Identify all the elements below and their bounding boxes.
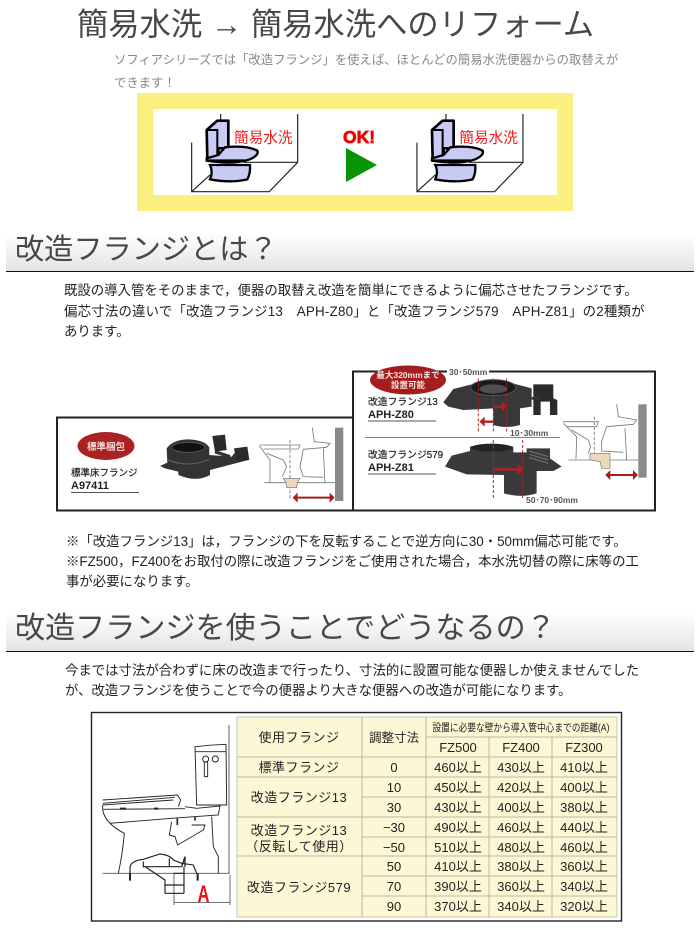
icon: standard toilet section [259,428,343,503]
table adjustment values: 90 [387,899,401,914]
table distance values: 360以上 [560,859,608,874]
table distance values: 380以上 [560,800,608,815]
heading bar: what is the flange [6,233,694,272]
label: A: A [198,881,210,908]
table flange names: 改造フランジ579 [247,880,351,895]
dimension: 10-30mm: 10･30mm [510,428,549,438]
panel: reform diagram [137,93,573,211]
table distance values: 430以上 [497,760,545,775]
table distance values: 490以上 [434,820,482,835]
label: standard floor flange: 標準床フランジ [71,467,138,479]
text: OK: OK! [343,127,375,147]
table: flange dimensions [237,717,617,917]
icon: toilet before [192,114,298,192]
table distance values: 430以上 [434,800,482,815]
intro text [114,53,618,90]
table distance values [434,760,608,914]
table distance values: 510以上 [434,840,482,855]
icon: toilet after: 簡易水洗 [459,128,518,146]
table distance values: 410以上 [434,859,482,874]
table distance values: 420以上 [497,780,545,795]
dimension: 30-50mm: 30･50mm [449,367,488,377]
table flange names [245,760,353,895]
table flange names: （反転して使用） [245,839,353,854]
table distance values: 460以上 [560,840,608,855]
table adjustment values: 50 [387,859,401,874]
table header: FZ300 [565,740,603,755]
table flange names: 標準フランジ [258,760,340,775]
table distance values: 480以上 [497,840,545,855]
notes text: ※「改造フランジ13」は，フランジの下を反転することで逆方向に30・50mm偏芯可能です。 [66,534,627,549]
label: standard floor flange: A97411 [71,480,109,492]
table distance values: 380以上 [497,859,545,874]
notes text: ※FZ500，FZ400をお取付の際に改造フランジをご使用された場合，本水洗切替の際に床等の工 [66,554,639,569]
table header: 使用フランジ [258,730,340,745]
label: flange 579 [368,448,443,474]
label: flange 13: APH-Z80 [368,409,414,421]
body text: what changes: 今までは寸法が合わずに床の改造まで行ったり、寸法的に設置可能な便器しか使えませんでした [65,663,639,678]
intro text: ソフィアシリーズでは「改造フランジ」を使えば、ほとんどの簡易水洗便器からの取替えが [114,53,618,67]
heading: what is the flange: 改造フランジとは？ [15,234,278,266]
label: flange 13: 改造フランジ13 [368,395,438,408]
table distance values: 360以上 [497,879,545,894]
table flange names: 改造フランジ13 [251,790,347,805]
table header: FZ500 [439,740,477,755]
table adjustment values: 0 [390,760,398,775]
table flange names: 改造フランジ13 [251,823,347,838]
icon: flange 13 [443,378,557,432]
label: max 320mm [370,366,446,394]
table header: 設置に必要な壁から導入管中心までの距離(A) [432,721,610,734]
table distance values: 450以上 [434,780,482,795]
table distance values: 370以上 [434,899,482,914]
arrow: green triangle [346,148,377,182]
heading bar: what changes [6,613,694,652]
body text: flange description: 既設の導入管をそのままで，便器の取替え改造を簡単にできるように偏芯させたフランジです。 [64,283,638,298]
icon: toilet after [417,114,523,192]
table header [258,721,610,755]
table adjustment values: −30 [383,820,405,835]
notes text: 事が必要になります。 [66,574,199,589]
table distance values: 340以上 [560,879,608,894]
heading: what changes: 改造フランジを使うことでどうなるの？ [15,612,556,645]
table header: 調整寸法 [369,731,419,745]
label: max 320mm: 最大320mmまで [376,370,440,380]
icon: modified toilet section [563,404,647,480]
table distance values: 410以上 [560,760,608,775]
notes text [66,534,639,589]
body text: what changes [65,663,639,698]
panel: modified flanges [352,366,656,512]
body text: flange description: あります。 [64,324,130,339]
intro text: できます！ [114,76,176,90]
label: flange 579: APH-Z81 [368,462,414,474]
table distance values: 340以上 [497,899,545,914]
table adjustment values: −50 [383,840,405,855]
icon: standard flange [160,435,249,479]
table adjustment values: 70 [387,879,401,894]
table adjustment values: 30 [387,800,401,815]
dimension: 50-70-90mm: 50･70･90mm [526,495,578,505]
table distance values: 320以上 [560,899,608,914]
table distance values: 460以上 [497,820,545,835]
table distance values: 400以上 [497,800,545,815]
table distance values: 460以上 [434,760,482,775]
table adjustment values: 10 [387,780,401,795]
label: standard package: 標準梱包 [87,441,125,453]
table header: FZ400 [502,740,540,755]
title: 簡易水洗 → 簡易水洗へのリフォーム [77,7,594,42]
icon: flange 579 [445,440,562,500]
table distance values: 400以上 [560,780,608,795]
icon: toilet cross-section [103,725,230,905]
table distance values: 440以上 [560,820,608,835]
label: standard package [78,432,134,460]
panel: standard flange [56,416,352,512]
label: flange 579: 改造フランジ579 [368,448,443,461]
label: standard floor flange [71,467,139,492]
body text: flange description [64,283,645,339]
body text: flange description: 偏芯寸法の違いで「改造フランジ13 APH-Z80」と「改造フランジ579 APH-Z81」の2種類が [64,304,645,318]
body text: what changes: が、改造フランジを使うことで今の便器より大きな便器への改造が可能になります。 [65,683,572,698]
table adjustment values [383,760,405,914]
table distance values: 390以上 [434,879,482,894]
label: flange 13 [368,395,438,421]
label: max 320mm: 設置可能 [391,380,425,390]
icon: toilet before: 簡易水洗 [234,128,293,146]
